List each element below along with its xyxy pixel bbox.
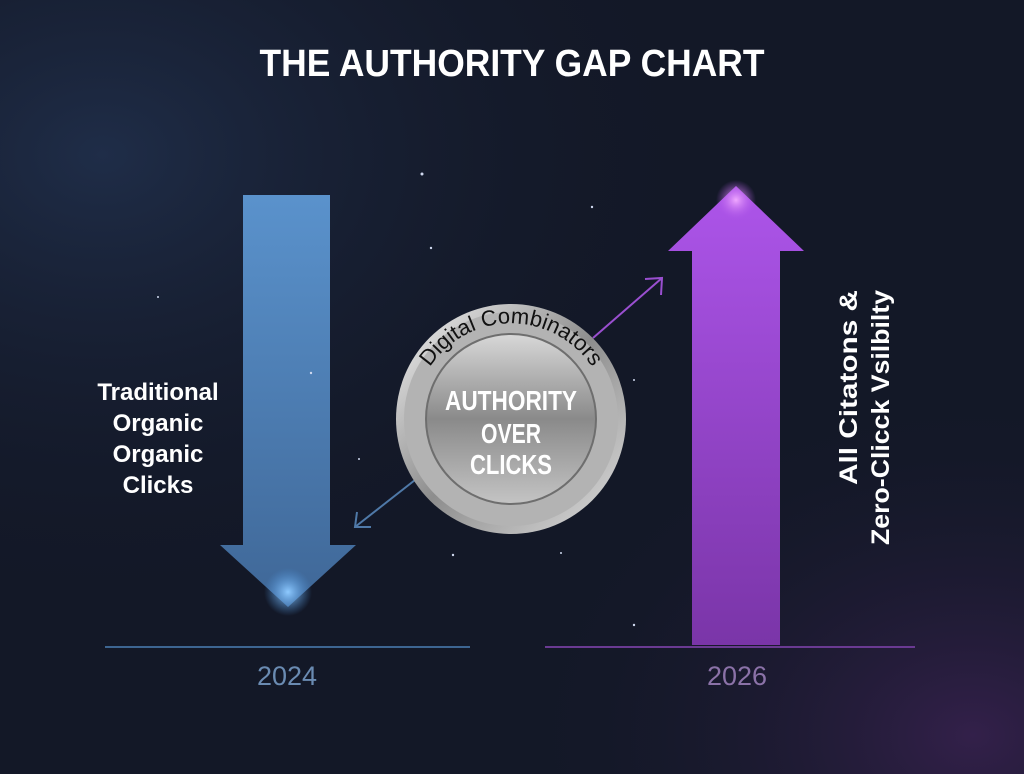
baseline 2024 [105,646,470,648]
baseline 2026 [545,646,915,648]
purple up arrow [668,180,804,645]
arrow: coin to purple [593,278,662,338]
coin center text: CLICKS [470,449,552,480]
coin center text: OVER [481,418,541,449]
year 2024: 2024 [257,661,317,691]
blue down arrow [220,195,356,616]
left label: Organic [113,410,203,437]
stars [157,172,635,626]
right rotated label: All Citatons & [835,290,863,485]
left label: Traditional [97,379,219,406]
coin arc text: Digital Combinators [418,310,600,366]
arrow: coin to blue [355,480,415,527]
right rotated label: Zero-Clicck Vsilbilty [867,290,895,545]
title: THE AUTHORITY GAP CHART [260,43,764,85]
left label: Organic [113,441,203,468]
year 2026: 2026 [707,661,767,691]
left label: Clicks [123,472,193,499]
coin center text: AUTHORITY [445,385,577,416]
coin badge [396,304,626,534]
